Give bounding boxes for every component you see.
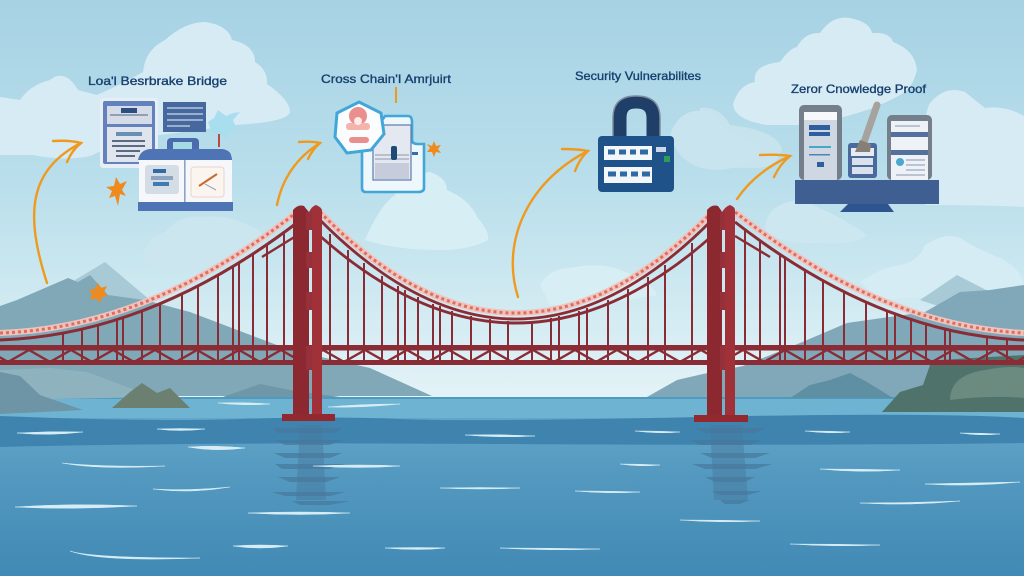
clouds [0, 18, 1024, 305]
panel: zero knowledge proof [791, 82, 939, 212]
left device [799, 105, 842, 180]
hexagon badge [335, 102, 384, 153]
suspension bridge [0, 205, 1024, 422]
arrow 3 [513, 149, 588, 297]
left island [112, 383, 190, 408]
document frame [362, 116, 424, 192]
arrow 4 [737, 155, 790, 199]
flower icon [208, 110, 240, 139]
right device [887, 115, 932, 180]
hangers [63, 230, 1007, 362]
document screen [100, 98, 158, 168]
red pin [218, 134, 220, 147]
distant mountains [0, 262, 1024, 397]
padlock icon [598, 96, 674, 192]
heading: Cross Chain'I Amrjuirt [321, 72, 452, 86]
burst icon near mountain [89, 283, 108, 303]
orange tick [395, 87, 397, 103]
machine [138, 138, 233, 211]
panel: cross chain [321, 72, 452, 192]
deck and truss [0, 345, 1024, 365]
right tower [694, 205, 748, 422]
water [0, 397, 1024, 576]
heading: Loa'l Besrbrake Bridge [88, 74, 227, 88]
water ripples [15, 403, 1020, 559]
panel: local bridge [88, 74, 240, 211]
panel: security vulnerabilities [575, 69, 701, 192]
wrench and small device [848, 105, 877, 178]
left tower [282, 205, 335, 421]
heading: Security Vulnerabilites [575, 69, 701, 83]
right island [882, 355, 1024, 412]
arrow 1 [34, 141, 81, 283]
arrow 2 [277, 142, 320, 205]
orange spark [427, 141, 441, 157]
heading: Zeror Cnowledge Proof [791, 82, 927, 96]
orange spark icon [106, 177, 127, 206]
tower reflections [272, 425, 772, 505]
dark water band [0, 415, 1024, 447]
main cables [0, 212, 1024, 340]
list card [163, 102, 206, 132]
monitor base and stand [795, 180, 939, 212]
sky background [0, 0, 1024, 400]
near hills [0, 368, 893, 414]
